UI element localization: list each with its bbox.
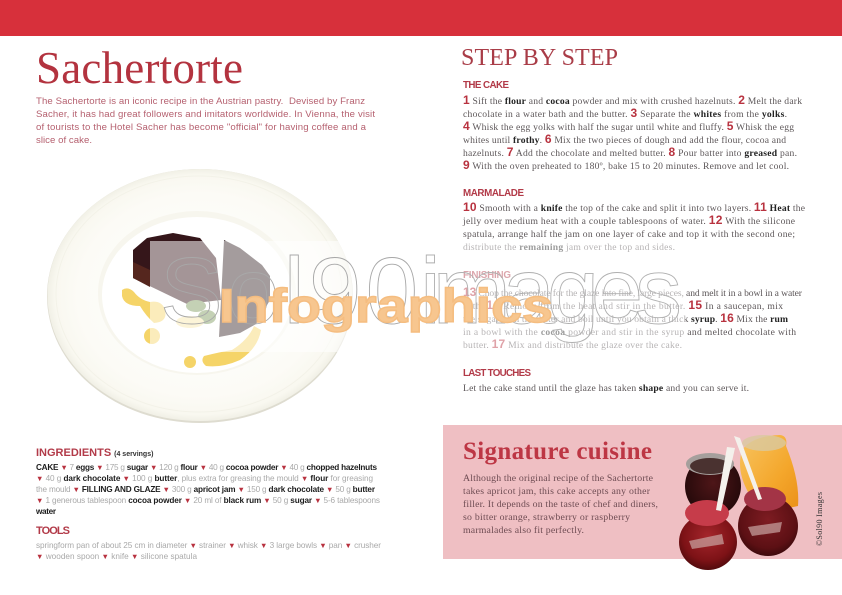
watermark: Sol90 <box>160 238 418 343</box>
watermark <box>150 238 685 352</box>
steps 10 to 12: jelly over medium heat with a couple tablespoons of water. 12 With the silicone <box>462 213 795 227</box>
section: last touches <box>463 368 749 394</box>
jar: dark <box>685 456 741 516</box>
ingredients list <box>35 463 380 516</box>
intro text <box>36 96 375 146</box>
step text: Let the cake stand until the glaze has taken shape and you can serve it. <box>463 383 749 394</box>
heading: tools: TOOLS <box>36 525 70 537</box>
intro text: slice of cake. <box>36 135 92 146</box>
steps 10 to 12: distribute the remaining jam over the top and sides. <box>463 242 675 253</box>
tools list: springform pan of about 25 cm in diameter ▼ strainer ▼ whisk ▼ 3 large bowls ▼ pan ▼ crusher <box>36 541 381 550</box>
heading: marmalade: MARMALADE <box>463 188 524 199</box>
icon: jam jars <box>679 435 798 570</box>
jar: orange <box>740 435 798 512</box>
watermark: images <box>420 238 682 343</box>
steps 13 to 17 <box>463 285 803 351</box>
ingredients list: CAKE ▼ 7 eggs ▼ 175 g sugar ▼ 120 g flour ▼ 40 g cocoa powder ▼ 40 g chopped hazelnuts <box>36 463 377 472</box>
header band <box>0 0 842 36</box>
photo credit: ©Sol90 Images <box>815 492 824 546</box>
panel text: filler. It depends on the taste of chef and diners, <box>463 499 658 510</box>
steps 13 to 17: bath. 14 Remove from the heat and stir in the butter. 15 In a saucepan, mix <box>463 298 783 312</box>
panel text: marmalades also fit perfectly. <box>463 525 584 536</box>
steps 1 to 9 <box>463 93 802 172</box>
steps 10 to 12: 10 Smooth with a knife the top of the cake and split it into two layers. 11 Heat the <box>463 200 805 214</box>
panel text <box>463 473 658 536</box>
watermark: Infographics <box>219 279 553 332</box>
tools list <box>36 541 381 561</box>
intro text: Sacher, it has had great followers and imitators worldwide. In Vienna, the visit <box>36 109 375 120</box>
jar: front right <box>738 496 798 556</box>
plate photo <box>47 169 353 423</box>
steps 13 to 17: butter. 17 Mix and distribute the glaze over the cake. <box>463 337 682 351</box>
steps 1 to 9: chocolate in a water bath and the butter. 3 Separate the whites from the yolks. <box>463 106 787 120</box>
steps 13 to 17: the sugar with the water and boil until you obtain a thick syrup. 16 Mix the rum <box>463 311 788 325</box>
title: Sachertorte <box>36 43 243 93</box>
jar: front left <box>679 514 737 570</box>
heading: the cake: THE CAKE <box>463 80 509 91</box>
spoons <box>716 447 735 511</box>
icon: apricot sauce <box>122 288 261 368</box>
section: the cake <box>463 80 802 172</box>
steps 10 to 12: spatula, arrange half the jam on one layer of cake and top it with the second one; <box>463 229 795 240</box>
intro text: The Sachertorte is an iconic recipe in the Austrian pastry. Devised by Franz <box>36 96 365 107</box>
panel: signature cuisine <box>443 425 842 570</box>
steps 1 to 9: 1 Sift the flour and cocoa powder and mix with crushed hazelnuts. 2 Melt the dark <box>463 93 802 107</box>
ingredients list: the mould ▼ FILLING AND GLAZE ▼ 300 g apricot jam ▼ 150 g dark chocolate ▼ 50 g butter <box>36 485 376 494</box>
section: finishing <box>463 270 803 351</box>
heading: last touches: LAST TOUCHES <box>463 368 531 379</box>
ingredients list: ▼ 1 generous tablespoon cocoa powder ▼ 20 ml of black rum ▼ 50 g sugar ▼ 5-6 tablespoons <box>36 496 380 505</box>
steps 1 to 9: whites until frothy. 6 Mix the two pieces of dough and add the flour, cocoa and <box>463 132 786 146</box>
icon: cake slice left <box>133 233 221 304</box>
steps 1 to 9: 4 Whisk the egg yolks with half the sugar until white and fluffy. 5 Whisk the egg <box>463 119 794 133</box>
tools list: ▼ wooden spoon ▼ knife ▼ silicone spatula <box>36 552 197 561</box>
heading: step by step: STEP BY STEP <box>461 45 618 71</box>
panel text: Although the original recipe of the Sachertorte <box>463 473 654 484</box>
section: marmalade <box>462 188 805 253</box>
icon: cake slice right <box>219 240 270 337</box>
steps 13 to 17: in a bowl with the cocoa powder and stir in the syrup and melted chocolate with <box>463 327 796 338</box>
panel text: so bitter orange, strawberry or raspberry <box>463 512 630 523</box>
steps 1 to 9: hazelnuts. 7 Add the chocolate and melted butter. 8 Pour batter into greased pan. <box>463 145 797 159</box>
panel text: takes apricot jam, this cake accepts any other <box>463 486 651 497</box>
steps 13 to 17: 13 Chop the chocolate for the glaze into fine, large pieces, and melt it in a bowl in a water <box>463 285 803 299</box>
ingredients list: water <box>35 507 57 516</box>
heading: signature cuisine: Signature cuisine <box>463 438 652 465</box>
heading: finishing: FINISHING <box>463 270 511 281</box>
icon: mint leaves <box>186 300 216 324</box>
ingredients list: ▼ 40 g dark chocolate ▼ 100 g butter, plus extra for greasing the mould ▼ flour for greasing <box>36 474 373 483</box>
heading: ingredients: INGREDIENTS (4 servings) <box>36 447 153 459</box>
steps 1 to 9: 9 With the oven preheated to 180º, bake 15 to 20 minutes. Remove and let cool. <box>463 158 789 172</box>
intro text: of tourists to the Hotel Sacher has become "official" for having coffee and a <box>36 122 367 133</box>
steps 10 to 12 <box>462 200 805 253</box>
